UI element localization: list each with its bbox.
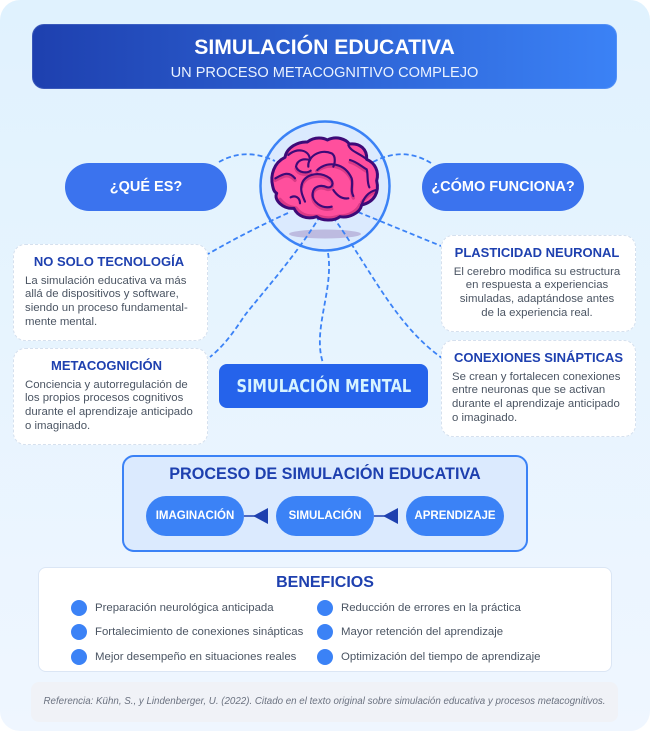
heading: CONEXIONES SINÁPTICAS bbox=[454, 350, 623, 365]
benefit item: Fortalecimiento de conexiones sinápticas bbox=[95, 626, 303, 638]
text block: Conciencia y autorregulación de bbox=[25, 378, 188, 390]
central label: simulacion mental: SIMULACIÓN MENTAL bbox=[236, 376, 411, 397]
heading: METACOGNICIÓN bbox=[51, 358, 162, 373]
process step: aprendizaje bbox=[406, 496, 504, 536]
benefit item bbox=[317, 600, 521, 616]
panel: no solo tecnologia bbox=[13, 244, 208, 341]
process step: aprendizaje: APRENDIZAJE bbox=[414, 510, 496, 522]
panel: proceso bbox=[122, 455, 528, 552]
text block: entre neuronas que se activan bbox=[452, 384, 605, 396]
benefit item: Preparación neurológica anticipada bbox=[95, 602, 274, 614]
callout: como funciona bbox=[422, 163, 584, 211]
heading: NO SOLO TECNOLOGÍA bbox=[34, 254, 184, 269]
callout: que es bbox=[65, 163, 227, 211]
central label: simulacion mental bbox=[219, 364, 428, 408]
medallion circle bbox=[259, 120, 391, 252]
reference note bbox=[31, 682, 618, 722]
text block: Se crean y fortalecen conexiones bbox=[452, 370, 620, 382]
benefit item bbox=[317, 624, 503, 640]
heading: PROCESO DE SIMULACIÓN EDUCATIVA bbox=[169, 465, 481, 483]
text block: o imaginado. bbox=[452, 412, 517, 424]
benefit item: Mayor retención del aprendizaje bbox=[341, 626, 503, 638]
benefit item bbox=[71, 600, 274, 616]
panel: beneficios bbox=[38, 567, 612, 672]
arrow: aprendizaje to simulacion bbox=[374, 508, 398, 524]
text block: durante el aprendizaje anticipado bbox=[452, 398, 620, 410]
text block bbox=[25, 274, 188, 328]
text block: siendo un proceso fundamental- bbox=[25, 302, 188, 314]
text block bbox=[452, 370, 620, 424]
heading: BENEFICIOS bbox=[276, 574, 374, 591]
text block: en respuesta a experiencias bbox=[466, 279, 608, 291]
heading: PLASTICIDAD NEURONAL bbox=[455, 245, 619, 260]
text block: allá de dispositivos y software, bbox=[25, 288, 179, 300]
reference note: Referencia: Kühn, S., y Lindenberger, U. (2022). Citado en el texto original sobre simulación educativa y procesos metacognitivos. bbox=[43, 696, 606, 707]
title: SIMULACIÓN EDUCATIVA bbox=[194, 36, 455, 59]
process step: imaginacion bbox=[146, 496, 244, 536]
benefit item bbox=[71, 649, 296, 665]
panel: metacognicion bbox=[13, 348, 208, 445]
benefit item: Optimización del tiempo de aprendizaje bbox=[341, 651, 540, 663]
text block: simuladas, adaptándose antes bbox=[460, 293, 614, 305]
panel: plasticidad neuronal bbox=[441, 235, 636, 332]
text block: o imaginado. bbox=[25, 420, 90, 432]
process step: imaginacion: IMAGINACIÓN bbox=[156, 510, 234, 522]
icon: brain bbox=[270, 136, 379, 222]
text block: mente mental. bbox=[25, 316, 97, 328]
text block: durante el aprendizaje anticipado bbox=[25, 406, 193, 418]
arrow: simulacion to imaginacion bbox=[244, 508, 268, 524]
text block: de la experiencia real. bbox=[481, 307, 593, 319]
panel: conexiones sinapticas bbox=[441, 340, 636, 437]
header banner bbox=[32, 24, 617, 89]
benefit item bbox=[71, 624, 303, 640]
text block: La simulación educativa va más bbox=[25, 274, 186, 286]
benefit item bbox=[317, 649, 540, 665]
text block bbox=[454, 266, 620, 319]
callout: que es: ¿QUÉ ES? bbox=[110, 179, 182, 195]
text block: El cerebro modifica su estructura bbox=[454, 266, 620, 278]
process step: simulacion: SIMULACIÓN bbox=[289, 510, 361, 522]
text block: los propios procesos cognitivos bbox=[25, 392, 183, 404]
subtitle: UN PROCESO METACOGNITIVO COMPLEJO bbox=[171, 65, 478, 81]
benefit item: Mejor desempeño en situaciones reales bbox=[95, 651, 296, 663]
text block bbox=[25, 378, 193, 432]
callout: como funciona: ¿CÓMO FUNCIONA? bbox=[431, 179, 575, 195]
process step: simulacion bbox=[276, 496, 374, 536]
benefit item: Reducción de errores en la práctica bbox=[341, 602, 521, 614]
